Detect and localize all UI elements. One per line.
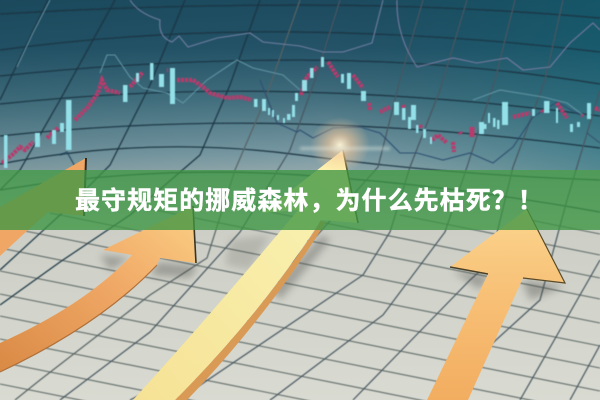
arrow: orange, right <box>427 209 565 400</box>
candlesticks: cyan <box>4 57 591 168</box>
title banner <box>0 170 600 230</box>
arrow: orange, lower left <box>0 206 196 372</box>
arrow shadows <box>100 235 565 300</box>
candlesticks: red <box>2 62 600 163</box>
light flare on arrow tip <box>300 117 390 173</box>
arrow: pale yellow, centre <box>133 150 358 400</box>
arrow: far left, partly cropped <box>0 158 86 256</box>
title text: 最守规矩的挪威森林，为什么先枯死？！ <box>75 187 544 215</box>
indicator lines <box>17 0 600 170</box>
